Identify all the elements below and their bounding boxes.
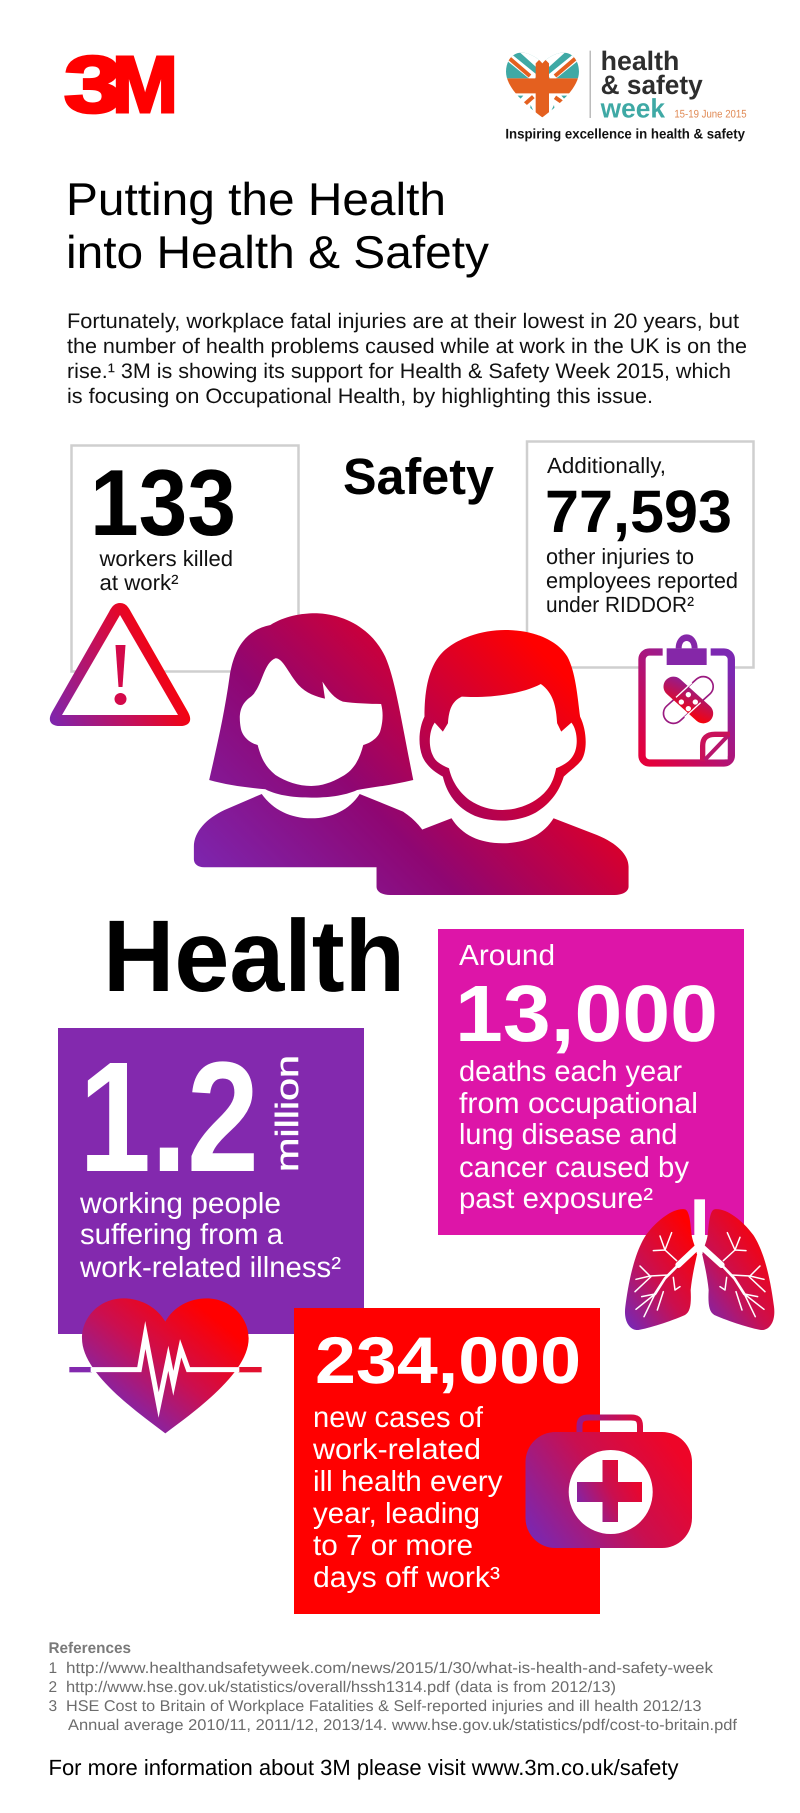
panel: workers killed — [72, 446, 298, 672]
icon: lungs — [625, 1199, 774, 1330]
label — [79, 1188, 341, 1284]
label: year, leading — [313, 1498, 480, 1530]
bandage — [659, 672, 717, 727]
stat: 77,593: 77,593 — [545, 478, 732, 545]
woman face — [240, 658, 383, 786]
page fold — [703, 734, 730, 761]
reference 3: 3 — [48, 1698, 57, 1715]
icon: union jack heart — [506, 52, 579, 118]
references — [48, 1640, 738, 1734]
label: ill health every — [313, 1466, 503, 1498]
clip — [667, 634, 707, 665]
label: cancer caused by — [459, 1152, 689, 1184]
text: week: week — [600, 93, 665, 123]
text: and safety: & safety — [601, 70, 703, 100]
icon: heart with pulse — [69, 1298, 262, 1433]
stat: 13,000: 13,000 — [455, 969, 718, 1058]
panel: 13,000 — [438, 929, 744, 1235]
logo: health and safety week — [503, 46, 747, 141]
intro text: Fortunately, workplace fatal injuries are at their lowest in 20 years, but — [67, 310, 739, 333]
label: additionally: Additionally, — [547, 453, 666, 478]
heading: Health: Health — [103, 899, 405, 1013]
label: workers killed at work: workers killed — [98, 546, 233, 571]
icon: two people — [194, 613, 629, 895]
logo: 3M: M — [112, 40, 178, 129]
reference 1: 1 — [48, 1660, 57, 1677]
label: from occupational — [459, 1088, 698, 1120]
stat: 133: 133 — [90, 450, 236, 555]
intro text — [67, 310, 747, 408]
label: work-related illness² — [79, 1252, 341, 1284]
icon: first aid kit — [526, 1418, 692, 1548]
label: suffering from a — [80, 1219, 284, 1251]
label: other injuries: other injuries to — [546, 544, 694, 569]
label: working people — [79, 1188, 281, 1220]
logo: 3M: 3 — [64, 40, 122, 129]
clip gaps — [663, 647, 711, 657]
label: past exposure² — [459, 1183, 653, 1215]
woman — [194, 613, 434, 867]
intro text: rise.¹ 3M is showing its support for Health & Safety Week 2015, which — [67, 360, 731, 383]
reference 3: HSE Cost to Britain of Workplace Fatalities & Self-reported injuries and ill health 2012/13 — [66, 1698, 702, 1715]
title — [66, 173, 489, 278]
label — [312, 1402, 503, 1594]
label: to 7 or more — [313, 1530, 473, 1562]
panel: other injuries — [527, 442, 754, 668]
icon: clipboard with bandage — [642, 634, 731, 763]
label: other injuries: under RIDDOR² — [546, 592, 694, 617]
references heading: References — [48, 1640, 131, 1657]
label — [459, 1056, 698, 1215]
intro text: is focusing on Occupational Health, by highlighting this issue. — [67, 385, 653, 408]
man — [377, 630, 629, 895]
label: workers killed at work: at work² — [100, 570, 178, 595]
text: strapline: Inspiring excellence in health & safety — [505, 126, 745, 141]
label: deaths each year — [459, 1056, 682, 1088]
divider — [589, 51, 592, 118]
reference 3 — [48, 1698, 738, 1734]
stat: 1.2: 1.2 — [79, 1030, 259, 1205]
heading: Safety: Safety — [343, 448, 495, 505]
title: Putting the Health — [66, 173, 446, 225]
panel: 234,000 — [294, 1308, 600, 1614]
label: other injuries: employees reported — [546, 568, 738, 593]
text: health: health — [601, 46, 679, 76]
label: workers killed at work — [98, 546, 233, 595]
logo: 3M — [64, 40, 178, 129]
label: other injuries — [546, 544, 738, 617]
label: work-related — [312, 1434, 481, 1466]
intro text: the number of health problems caused while at work in the UK is on the — [67, 335, 747, 358]
label: around: Around — [459, 940, 555, 972]
panel: 1.2 million — [58, 1028, 364, 1334]
label: new cases of — [313, 1402, 484, 1434]
label: lung disease and — [459, 1119, 678, 1151]
reference 2: 2 — [48, 1679, 57, 1696]
stat: 234,000: 234,000 — [315, 1323, 581, 1397]
man face — [430, 684, 577, 810]
label: days off work³ — [313, 1562, 500, 1594]
stat unit: million: million — [269, 1055, 305, 1172]
reference 2: http://www.hse.gov.uk/statistics/overall/hssh1314.pdf (data is from 2012/13) — [66, 1679, 616, 1696]
airways — [635, 1199, 765, 1317]
icon: warning triangle — [50, 603, 190, 726]
title: into Health & Safety — [66, 226, 489, 278]
reference 3: Annual average 2010/11, 2011/12, 2013/14. www.hse.gov.uk/statistics/pdf/cost-to-britain.pdf — [68, 1717, 738, 1734]
footer: For more information about 3M please visit www.3m.co.uk/safety — [48, 1755, 678, 1780]
clipboard frame — [642, 652, 731, 763]
reference 1: http://www.healthandsafetyweek.com/news/2015/1/30/what-is-health-and-safety-week — [66, 1660, 713, 1677]
text: date: 15-19 June 2015 — [674, 107, 747, 120]
